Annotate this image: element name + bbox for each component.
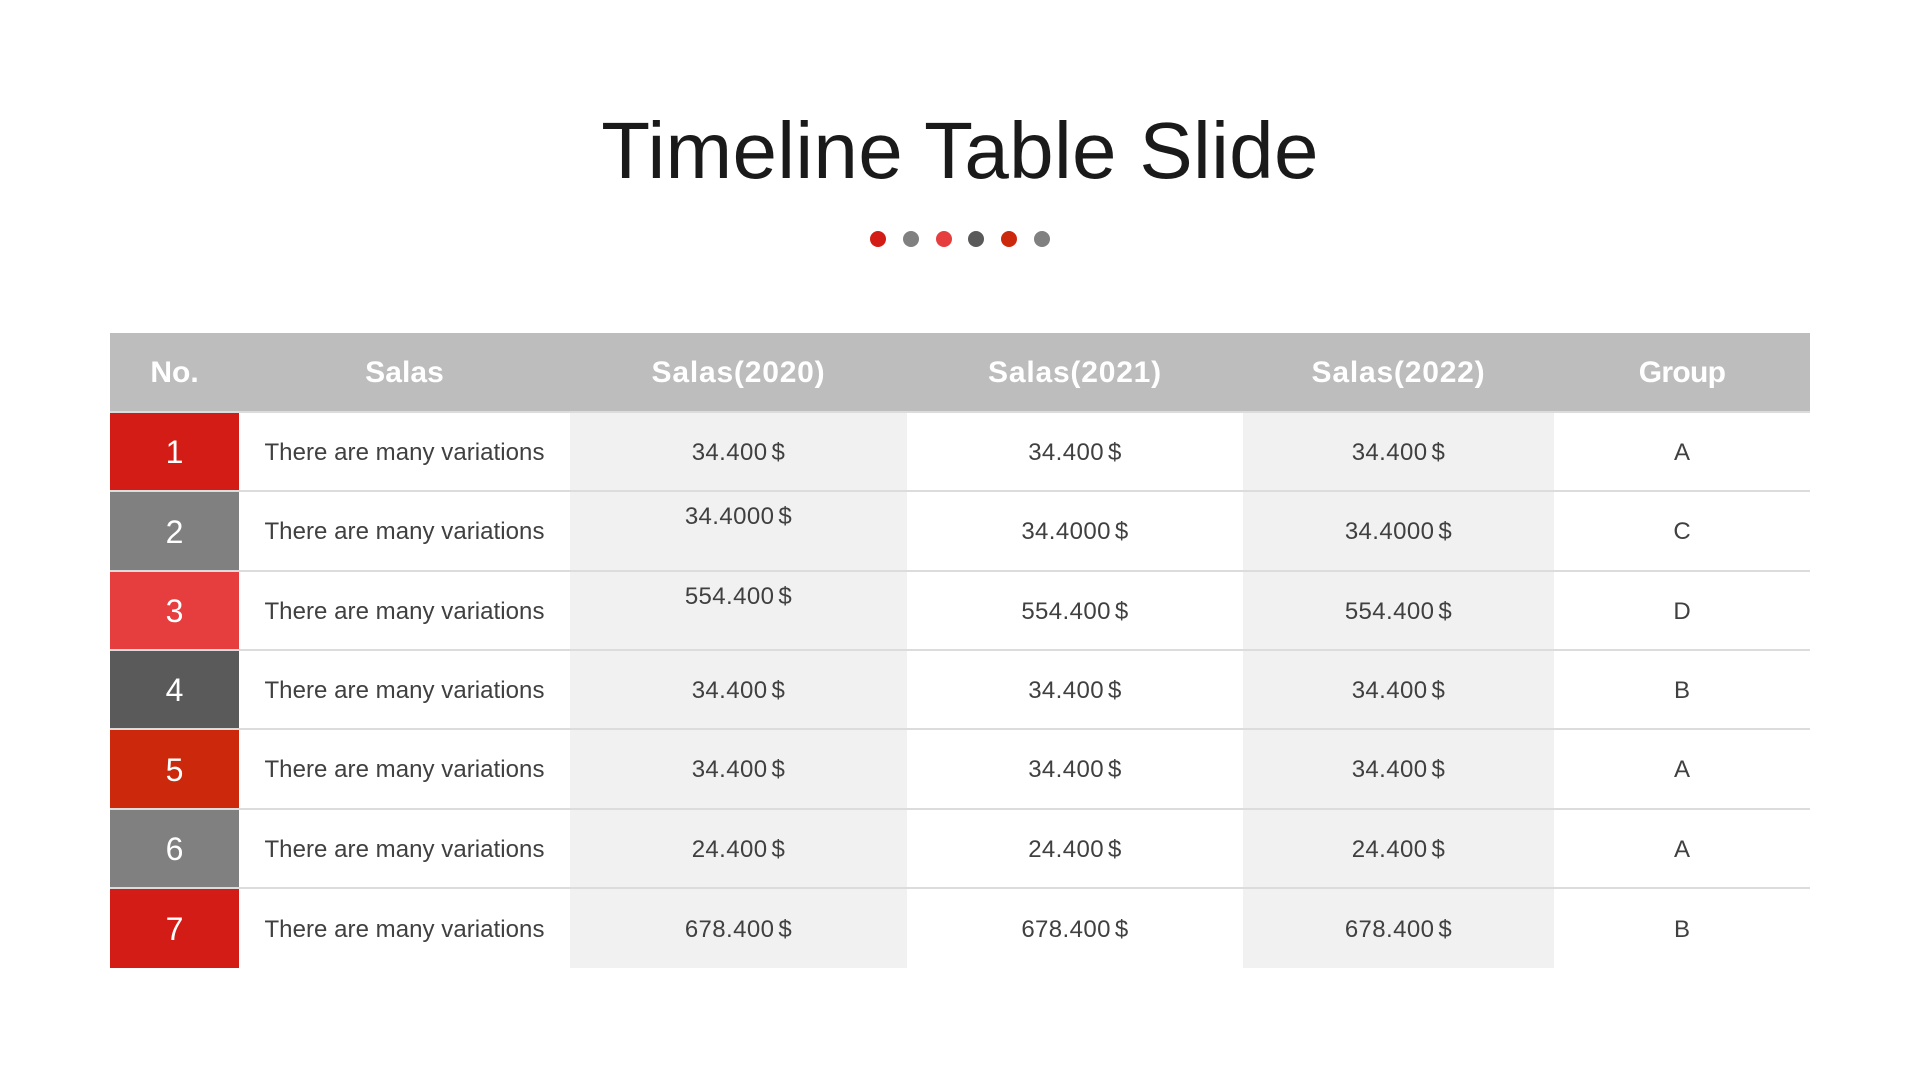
value 2022 bbox=[1243, 810, 1554, 887]
header: Salas(2022): Salas(2022) bbox=[1312, 356, 1485, 389]
row number 6 bbox=[110, 810, 239, 887]
value 2020 bbox=[570, 572, 907, 649]
row number 3: 3 bbox=[166, 593, 183, 629]
row number 2: 2 bbox=[166, 514, 183, 550]
row number 6: 6 bbox=[166, 831, 183, 867]
description: There are many variations bbox=[264, 916, 545, 942]
value 2020: 34.4000 $ bbox=[685, 503, 792, 530]
description: There are many variations bbox=[264, 836, 545, 862]
description: There are many variations bbox=[264, 598, 545, 624]
header: Salas(2020): Salas(2020) bbox=[652, 356, 825, 389]
header: Salas(2021): Salas(2021) bbox=[988, 356, 1162, 389]
row number 4 bbox=[110, 651, 239, 728]
group: A bbox=[1674, 836, 1690, 862]
value 2022 bbox=[1243, 889, 1554, 968]
row number 1 bbox=[110, 413, 239, 490]
row number 5: 5 bbox=[166, 752, 183, 788]
group: D bbox=[1673, 598, 1691, 624]
value 2020: 34.400 $ bbox=[692, 676, 785, 704]
group: A bbox=[1674, 756, 1690, 783]
value 2021: 678.400 $ bbox=[1021, 916, 1129, 942]
value 2020 bbox=[570, 651, 907, 728]
value 2020: 554.400 $ bbox=[685, 582, 792, 610]
group: B bbox=[1674, 676, 1690, 704]
row number 2 bbox=[110, 492, 239, 570]
value 2020: 34.400 $ bbox=[692, 438, 785, 466]
value 2020 bbox=[570, 492, 907, 570]
value 2020: 678.400 $ bbox=[685, 916, 792, 942]
value 2021: 34.400 $ bbox=[1028, 756, 1122, 783]
row number 1: 1 bbox=[166, 434, 183, 470]
header: No.: No. bbox=[150, 356, 199, 389]
value 2022 bbox=[1243, 413, 1554, 490]
value 2022: 34.4000 $ bbox=[1345, 518, 1452, 545]
header: Salas: Salas bbox=[365, 356, 444, 389]
header: Group: Group bbox=[1639, 356, 1725, 389]
table row 5 bbox=[110, 728, 1810, 808]
row number 5 bbox=[110, 730, 239, 808]
value 2020: 24.400 $ bbox=[692, 836, 785, 862]
description: There are many variations bbox=[264, 438, 545, 466]
table row 1 bbox=[110, 411, 1810, 490]
value 2022: 554.400 $ bbox=[1345, 598, 1452, 624]
row number 7: 7 bbox=[166, 911, 183, 947]
table row 3 bbox=[110, 570, 1810, 649]
value 2022 bbox=[1243, 572, 1554, 649]
decorative dots row bbox=[870, 231, 1050, 247]
value 2021: 34.4000 $ bbox=[1021, 518, 1129, 545]
value 2020 bbox=[570, 810, 907, 887]
value 2022: 34.400 $ bbox=[1352, 756, 1445, 783]
table row 6 bbox=[110, 808, 1810, 887]
row number 4: 4 bbox=[166, 672, 183, 708]
value 2021: 34.400 $ bbox=[1028, 438, 1122, 466]
table row 4 bbox=[110, 649, 1810, 728]
group: A bbox=[1674, 438, 1690, 466]
value 2020: 34.400 $ bbox=[692, 756, 785, 783]
title: Timeline Table Slide bbox=[601, 106, 1319, 195]
value 2022 bbox=[1243, 492, 1554, 570]
table row 7 bbox=[110, 887, 1810, 968]
row number 7 bbox=[110, 889, 239, 968]
value 2020 bbox=[570, 730, 907, 808]
value 2021: 24.400 $ bbox=[1028, 836, 1122, 862]
description: There are many variations bbox=[264, 756, 545, 783]
row number 3 bbox=[110, 572, 239, 649]
table row 2 bbox=[110, 490, 1810, 570]
table header row bbox=[110, 333, 1810, 411]
value 2022: 34.400 $ bbox=[1352, 676, 1445, 704]
value 2021: 554.400 $ bbox=[1021, 598, 1129, 624]
description: There are many variations bbox=[264, 518, 545, 545]
group: B bbox=[1674, 916, 1690, 942]
description: There are many variations bbox=[264, 676, 545, 704]
value 2022: 24.400 $ bbox=[1352, 836, 1445, 862]
panel: sales table bbox=[110, 333, 1810, 968]
value 2020 bbox=[570, 889, 907, 968]
value 2022 bbox=[1243, 651, 1554, 728]
value 2022 bbox=[1243, 730, 1554, 808]
group: C bbox=[1673, 518, 1691, 545]
value 2022: 34.400 $ bbox=[1352, 438, 1445, 466]
value 2021: 34.400 $ bbox=[1028, 676, 1122, 704]
value 2022: 678.400 $ bbox=[1345, 916, 1452, 942]
value 2020 bbox=[570, 413, 907, 490]
